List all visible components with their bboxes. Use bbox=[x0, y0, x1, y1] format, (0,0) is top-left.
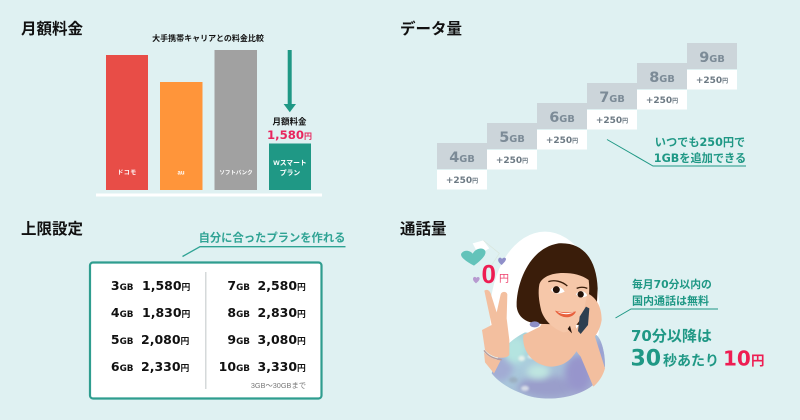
chart title: 大手携帯キャリアとの料金比較 bbox=[152, 33, 264, 43]
bar: au bbox=[160, 82, 202, 190]
prices: right column: 2,830円 bbox=[258, 305, 306, 320]
callout: add 1GB anytime: 1GBを追加できる bbox=[654, 151, 746, 165]
step: 4GB: +250円 bbox=[446, 176, 478, 186]
bar: W smart plan bbox=[269, 144, 311, 190]
bar: W smart plan: Wスマート bbox=[273, 159, 307, 167]
prices: right column: 3,080円 bbox=[258, 332, 306, 347]
eyes and brows bbox=[548, 281, 587, 297]
heading: cap setting: 上限設定 bbox=[21, 220, 83, 238]
heading: data amount: データ量 bbox=[400, 19, 462, 38]
yen mark: 円 bbox=[499, 274, 509, 285]
wrist bbox=[484, 352, 501, 373]
earring bbox=[530, 321, 540, 327]
callout: build your own plan bbox=[182, 230, 346, 256]
prices: right column: 2,580円 bbox=[258, 278, 306, 293]
prices: left column: 2,080円 bbox=[141, 332, 190, 347]
bracelet bbox=[484, 350, 502, 360]
prices: left column: 5GB bbox=[111, 332, 134, 347]
callout: free within 70 minutes: 毎月70分以内の bbox=[632, 277, 712, 291]
text: 10 yen per 30 seconds: 円 bbox=[751, 354, 764, 370]
note: range: 3GB～30GBまで bbox=[251, 381, 306, 390]
phone hand and arm bbox=[572, 293, 605, 387]
price table bbox=[90, 262, 322, 398]
label: monthly fee: 月額料金 bbox=[272, 116, 307, 126]
phone bbox=[578, 307, 589, 334]
prices: right column: 10GB bbox=[219, 359, 250, 374]
callout: free within 70 minutes: 国内通話は無料 bbox=[632, 294, 709, 308]
prices: right column: 7GB bbox=[227, 278, 250, 293]
white backdrop bbox=[490, 232, 600, 398]
step: 8GB: +250円 bbox=[646, 96, 678, 106]
step: 6GB: 6GB bbox=[549, 110, 575, 126]
prices: left column: 1,580円 bbox=[142, 278, 191, 293]
step: 6GB: +250円 bbox=[546, 136, 578, 146]
illustration: woman on phone bbox=[461, 232, 610, 405]
step: 9GB: 9GB bbox=[699, 50, 725, 66]
bar: docomo bbox=[106, 55, 148, 190]
text: after 70 minutes: 70分以降は bbox=[631, 327, 712, 345]
bar chart bbox=[96, 50, 322, 196]
prices: right column: 3,330円 bbox=[258, 359, 306, 374]
prices: left column: 1,830円 bbox=[142, 305, 191, 320]
step: 5GB bbox=[487, 123, 537, 170]
step: 7GB bbox=[587, 83, 637, 130]
step: 4GB: 4GB bbox=[449, 150, 475, 166]
step: 8GB: 8GB bbox=[649, 70, 675, 86]
step: 9GB: +250円 bbox=[696, 76, 728, 86]
panel: monthly fee bbox=[21, 19, 322, 196]
prices: right column bbox=[219, 278, 306, 374]
bar: softbank bbox=[214, 50, 257, 190]
callout: free within 70 minutes bbox=[616, 277, 718, 318]
baseline bbox=[96, 194, 322, 196]
hearts bbox=[461, 240, 506, 283]
panel: call allowance bbox=[400, 220, 764, 405]
hair bbox=[517, 243, 598, 325]
step: 5GB: +250円 bbox=[496, 156, 528, 166]
heading: call allowance: 通話量 bbox=[400, 220, 447, 238]
price: 0 yen: 0 bbox=[482, 259, 496, 289]
shirt bbox=[492, 332, 605, 398]
bar: softbank: ソフトバンク bbox=[219, 168, 253, 176]
stair steps bbox=[437, 43, 737, 190]
text: 10 yen per 30 seconds: 秒あたり bbox=[663, 354, 719, 370]
prices: left column: 2,330円 bbox=[141, 359, 190, 374]
step: 5GB: 5GB bbox=[499, 130, 525, 146]
price: 1,580 yen: 1,580円 bbox=[267, 128, 312, 142]
step: 9GB bbox=[687, 43, 737, 90]
panel: cap setting bbox=[21, 220, 346, 398]
step: 8GB bbox=[637, 63, 687, 110]
bar: au: au bbox=[177, 170, 185, 176]
text: 10 yen per 30 seconds: 10 bbox=[723, 346, 751, 370]
step: 7GB: 7GB bbox=[599, 90, 625, 106]
prices: left column: 3GB bbox=[111, 278, 134, 293]
callout: add 1GB anytime: いつでも250円で bbox=[655, 136, 745, 149]
mouth bbox=[555, 311, 576, 317]
prices: right column: 9GB bbox=[227, 332, 250, 347]
prices: right column: 8GB bbox=[227, 305, 250, 320]
step: 4GB bbox=[437, 143, 487, 190]
peace hand bbox=[482, 290, 509, 358]
callout: build your own plan: 自分に合ったプランを作れる bbox=[199, 230, 345, 244]
heading: monthly fee: 月額料金 bbox=[21, 19, 84, 38]
neck and chest bbox=[523, 315, 580, 367]
prices: left column: 4GB bbox=[111, 305, 134, 320]
prices: left column bbox=[111, 278, 191, 374]
arrow: down bbox=[284, 50, 296, 112]
panel: data amount bbox=[400, 19, 746, 190]
text: 10 yen per 30 seconds: 30 bbox=[630, 346, 661, 372]
bar: docomo: ドコモ bbox=[117, 170, 137, 176]
step: 7GB: +250円 bbox=[596, 116, 628, 126]
prices: left column: 6GB bbox=[111, 359, 134, 374]
face bbox=[539, 273, 589, 332]
bar: W smart plan: プラン bbox=[280, 169, 300, 177]
callout: add 1GB anytime bbox=[607, 136, 746, 166]
step: 6GB bbox=[537, 103, 587, 150]
